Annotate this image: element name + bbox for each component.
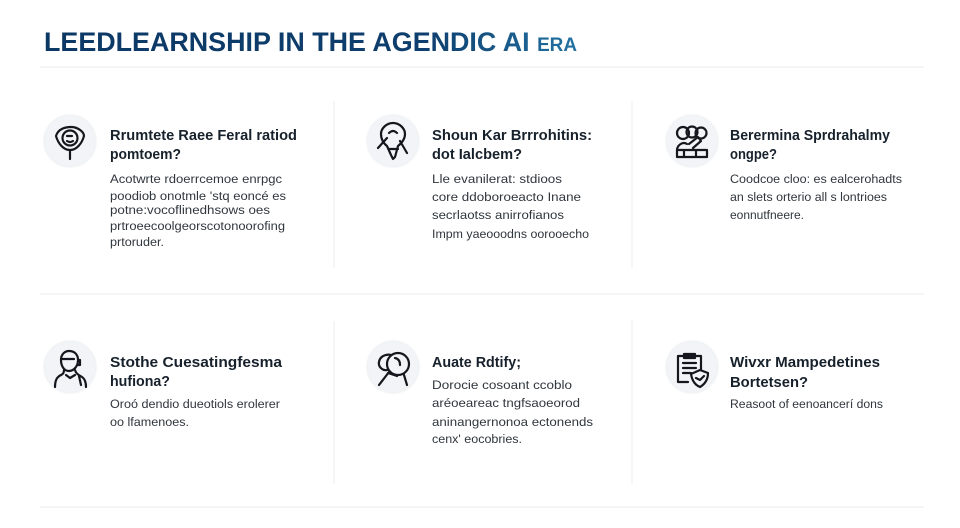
card body text: an slets orterio all s lontrioes — [730, 190, 887, 204]
card body text: Acotwrte rdoerrcemoe enrpgc — [110, 172, 282, 186]
card heading: ongpe? — [730, 147, 777, 163]
panel: top right card — [666, 115, 902, 222]
card heading: Bortetsen? — [730, 375, 808, 391]
card body text: core ddoboroeacto Inane — [432, 190, 581, 204]
card body text: cenx' eocobries. — [432, 432, 522, 446]
panel: bottom middle card — [367, 341, 593, 446]
card heading: Wivxr Mampedetines — [730, 355, 880, 371]
card heading: dot Ialcbem? — [432, 147, 522, 163]
card body text: aninangernonoa ectonends — [432, 415, 593, 429]
icon: light bulb — [367, 115, 419, 167]
card heading: Stothe Cuesatingfesma — [110, 355, 283, 371]
card body text: Lle evanilerat: stdioos — [432, 172, 562, 186]
card body text: Coodcoe cloo: es ealcerohadts — [730, 172, 902, 186]
icon: head on stem — [44, 115, 96, 167]
icon: magnifying glasses — [367, 341, 419, 393]
card body text: eonnutfneere. — [730, 208, 804, 222]
card body text: potne:vocoflinedhsows oes — [110, 203, 270, 217]
card body text: prtroeecoolgeorscotonoorofing — [110, 219, 285, 233]
card heading: Shoun Kar Brrrohitins: — [432, 128, 592, 144]
card body text: Reasoot of eenoancerí dons — [730, 397, 883, 411]
card heading: pomtoem? — [110, 147, 181, 163]
card body text: poodiob onotmle 'stq eoncé es — [110, 189, 286, 203]
icon: person with headset — [44, 341, 96, 393]
panel: top left card — [44, 115, 297, 249]
title: LEEDLEARNSHIP IN THE AGENDIC AI ERA — [44, 27, 577, 57]
card heading: Berermina Sprdrahalmy — [730, 128, 890, 144]
panel: top middle card — [367, 115, 592, 241]
card heading: hufiona? — [110, 374, 170, 390]
card heading: Rrumtete Raee Feral ratiod — [110, 128, 297, 144]
card body text: secrlaotss anirrofianos — [432, 208, 564, 222]
panel: bottom right card — [666, 341, 883, 411]
card body text: Oroó dendio dueotiols erolerer — [110, 397, 280, 411]
icon: people at desk — [666, 115, 718, 167]
card body text: oo lfamenoes. — [110, 415, 189, 429]
card body text: prtoruder. — [110, 235, 164, 249]
card heading: Auate Rdtify; — [432, 355, 521, 371]
icon: document with shield — [666, 341, 718, 393]
panel: bottom left card — [44, 341, 283, 429]
card body text: Impm yaeooodns oorooecho — [432, 227, 589, 241]
card body text: aréoeareac tngfsaoeorod — [432, 396, 580, 410]
card body text: Dorocie cosoant ccoblo — [432, 378, 572, 392]
